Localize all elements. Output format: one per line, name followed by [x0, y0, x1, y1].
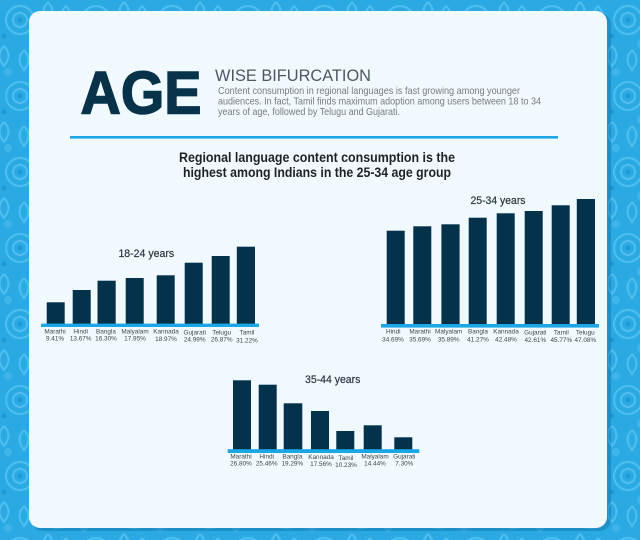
intro paragraph: audiences. In fact, Tamil finds maximum adoption among users between 18 to 34 [218, 96, 541, 108]
labels 35-44: Bangla [282, 454, 303, 461]
labels 25-34 [382, 329, 596, 344]
labels 25-34: Malyalam [435, 329, 462, 336]
intro paragraph: Content consumption in regional languages is fast growing among younger [218, 86, 521, 97]
labels 18-24: 9.41% [46, 336, 64, 342]
labels 25-34: Hindi [386, 329, 401, 336]
labels 35-44: Tamil [339, 455, 353, 462]
labels 18-24: Tamil [240, 330, 254, 336]
labels 18-24: Telugu [212, 330, 232, 336]
labels 35-44: Gujarati [393, 454, 415, 461]
labels 25-34: 41.27% [467, 336, 489, 343]
labels 18-24: Marathi [44, 328, 66, 336]
labels 25-34: 35.89% [438, 336, 460, 343]
labels 25-34: Marathi [409, 329, 431, 336]
heading divider [70, 136, 558, 139]
labels 35-44: 25.46% [256, 461, 278, 468]
chart heading: highest among Indians in the 25-34 age group [183, 165, 451, 180]
axis 18-24 [41, 324, 259, 327]
labels 35-44: 14.44% [364, 461, 386, 468]
labels 18-24: Gujarati [184, 330, 206, 336]
labels 25-34: 45.77% [550, 337, 572, 344]
labels 25-34: Telugu [576, 330, 595, 337]
title: AGE: AGE [80, 60, 202, 126]
labels 18-24: 16.30% [95, 336, 117, 342]
labels 25-34: Bangla [468, 329, 488, 336]
labels 18-24: Bangla [96, 328, 116, 336]
labels 25-34: 42.61% [524, 337, 546, 344]
intro paragraph: years of age, followed by Telugu and Gujarati. [218, 107, 400, 118]
labels 18-24: 31.22% [236, 338, 258, 344]
bars 25-34 [387, 199, 595, 325]
labels 25-34: Kannada [493, 329, 519, 336]
labels 25-34: 34.69% [382, 336, 404, 343]
labels 35-44: Kannada [308, 454, 334, 461]
labels 35-44: 19.29% [281, 461, 303, 468]
chart heading [179, 150, 455, 180]
labels 35-44: Malyalam [361, 454, 389, 461]
labels 18-24: Hindi [73, 328, 88, 336]
chart: 25-34 years [381, 195, 599, 344]
labels 25-34: 42.48% [495, 336, 517, 343]
chart title 25-34: 25-34 years [470, 195, 526, 207]
labels 18-24: 13.67% [70, 336, 92, 342]
labels 35-44: 17.56% [310, 461, 332, 468]
labels 18-24: 17.95% [124, 336, 146, 342]
labels 18-24: Kannada [153, 328, 179, 336]
chart title 35-44: 35-44 years [305, 374, 360, 386]
labels 35-44: 26.80% [230, 461, 252, 468]
chart: 18-24 years [41, 247, 259, 344]
labels 25-34: Gujarati [524, 330, 546, 337]
labels 18-24: 18.97% [155, 336, 177, 343]
intro paragraph [218, 86, 541, 118]
labels 35-44 [230, 454, 415, 469]
labels 35-44: Hindi [259, 454, 274, 461]
chart heading: Regional language content consumption is the [179, 150, 455, 165]
labels 18-24: Malyalam [121, 328, 149, 336]
labels 35-44: 7.30% [395, 461, 414, 468]
labels 35-44: 10.23% [335, 462, 357, 469]
labels 18-24: 26.87% [211, 336, 233, 344]
chart: 35-44 years [228, 374, 419, 469]
labels 25-34: Tamil [554, 330, 569, 337]
bars 18-24 [47, 247, 255, 324]
labels 25-34: 35.69% [409, 336, 431, 343]
bars 35-44 [233, 380, 412, 450]
labels 18-24 [44, 328, 258, 344]
chart title 18-24: 18-24 years [118, 248, 174, 260]
labels 35-44: Marathi [230, 454, 252, 461]
axis 35-44 [228, 449, 419, 453]
labels 18-24: 24.99% [184, 336, 206, 344]
axis 25-34 [381, 324, 599, 328]
subtitle: WISE BIFURCATION [215, 66, 371, 85]
labels 25-34: 47.08% [574, 337, 596, 344]
